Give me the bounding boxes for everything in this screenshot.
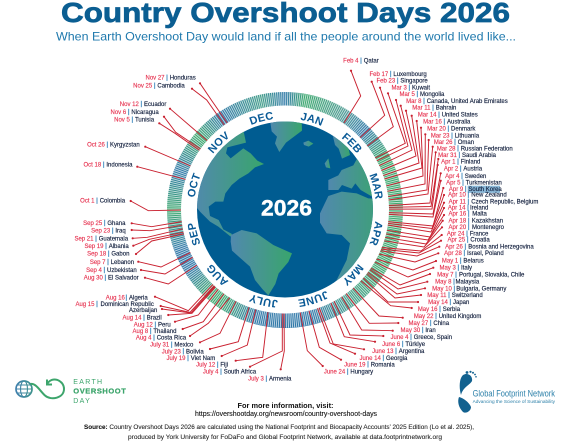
country labels: right side: June 14 (359, 356, 381, 362)
country labels: right side: Bulgaria, Germany (456, 287, 506, 293)
country labels: right side: May 22 (414, 314, 434, 320)
country labels: right side: Hungary (350, 370, 373, 376)
country labels: left side: July 19 (166, 356, 186, 362)
Iceland (303, 141, 313, 147)
country labels: right side: Portugal, Slovakia, Chile (459, 273, 525, 279)
country labels: right side: Romania (371, 362, 395, 368)
country labels: left side: Armenia (269, 377, 292, 383)
country labels: right side: Montenegro (472, 225, 505, 231)
country labels: left side: Nov 5 (114, 118, 130, 124)
footer: source note: produced by York University for FoDaFo and Global Footprint Network, available at data.footprintnetwork.org (128, 434, 442, 441)
country labels: right side (324, 58, 538, 376)
country labels: right side: South Korea (468, 187, 502, 193)
country labels: left side: Aug 12 (134, 323, 153, 329)
month names: OCT (188, 172, 200, 197)
country labels: right side: Canada, United Arab Emirates (427, 99, 508, 105)
country labels: right side: Austria (463, 167, 483, 173)
ring tick separators (174, 98, 396, 320)
country labels: left side: Sep 18 (87, 252, 107, 258)
country labels: right side: Mongolia (420, 92, 445, 98)
country labels: right side: June 6 (382, 342, 401, 348)
country labels: right side: May 30 (401, 328, 421, 334)
country labels: right side: May 1 (442, 259, 459, 265)
month names: DEC (249, 112, 273, 125)
country labels: right side: June 13 (372, 349, 394, 355)
country labels: right side: Kazakhstan (472, 219, 503, 225)
country labels: left side: July 12 (196, 363, 216, 369)
logo: Global Footprint Network: Global Footprint Network (473, 388, 555, 398)
Africa (320, 192, 373, 281)
country labels: right side: May 10 (432, 287, 452, 293)
country labels: left side: Aug 8 (133, 329, 149, 335)
Scandinavia (333, 135, 350, 159)
country labels: right side: Mar 5 (399, 92, 415, 98)
country labels: right side: Switzerland (452, 293, 483, 299)
country labels: right side: Apr 10 (448, 193, 466, 199)
month names: NOV (208, 131, 228, 154)
Greenland (270, 120, 302, 152)
country labels: right side: Apr 4 (445, 174, 460, 180)
logo: Earth Overshoot Day: EARTH (73, 379, 103, 386)
country labels: right side: France (470, 232, 489, 238)
country labels: right side: June 4 (390, 335, 409, 341)
country labels: right side: May 11 (427, 293, 447, 299)
South America (231, 230, 292, 295)
country labels: right side: May 8 (435, 280, 452, 286)
country labels: left side: Nov 27 (145, 76, 165, 82)
month names: MAR (370, 173, 383, 200)
country labels: left side: Aug 30 (84, 276, 103, 282)
country labels: right side: Mar 3 (391, 86, 407, 92)
country labels: left side: Oct 1 (80, 199, 95, 205)
country labels: right side: Türkiye (405, 342, 426, 348)
country labels: left side: July 4 (203, 370, 219, 376)
leader lines from ring to country labels (131, 71, 444, 369)
country labels: right side: Apr 16 (449, 212, 467, 218)
country labels: right side: Greece, Spain (414, 335, 452, 341)
country labels: right side: May 16 (418, 307, 438, 313)
logo: Global Footprint Network: Advancing the Science of Sustainability (473, 399, 556, 404)
country labels: left side: Ghana (107, 221, 126, 227)
country labels: left side: Sep 7 (90, 260, 106, 266)
country labels: left side: Nov 12 (120, 102, 139, 108)
month names: JUNE (298, 291, 328, 307)
country labels: left side: Sep 25 (83, 221, 103, 227)
country labels: right side: Feb 17 (370, 72, 389, 78)
country labels: left side: Gabon (111, 252, 129, 258)
country labels: right side: Malaysia (456, 280, 480, 286)
country labels: left side: Honduras (170, 76, 196, 82)
globe year label: 2026 (261, 196, 312, 220)
country labels: right side: Saudi Arabia (462, 153, 497, 159)
country labels: left side: July 31 (150, 343, 170, 349)
country labels: right side: Belarus (463, 259, 484, 265)
logo: Earth Overshoot Day: OVERSHOOT (73, 386, 126, 396)
white band for month names (181, 106, 389, 314)
country labels: right side: Ireland (470, 206, 488, 212)
country labels: left side: Kyrgyzstan (110, 143, 140, 149)
month names: SEP (188, 224, 200, 246)
country labels: left side: Tunisia (135, 118, 155, 124)
country labels: right side: Mar 23 (431, 134, 450, 140)
date ring of tick marks (167, 92, 403, 328)
country labels: left side (74, 74, 292, 383)
country labels: left side: Sep 23 (91, 229, 111, 235)
month names: AUG (207, 264, 228, 285)
country labels: right side: Apr 18 (449, 219, 467, 225)
month names: FEB (342, 132, 362, 152)
country labels: right side: Apr 11 (449, 200, 466, 206)
country labels: left side: Indonesia (106, 163, 133, 169)
country labels: right side: May 3 (439, 266, 456, 272)
subtitle: When Earth Overshoot Day would land if all the people around the world lived like... (56, 30, 516, 44)
month names (188, 112, 383, 308)
month names: APR (370, 221, 382, 246)
country labels: right side: Bosnia and Herzegovina (468, 245, 534, 251)
country labels: left side: Uzbekistan (107, 268, 137, 274)
country labels: right side: Georgia (386, 356, 408, 362)
country labels: right side: Australia (447, 120, 471, 126)
country labels: right side: May 27 (409, 321, 429, 327)
Europe (328, 159, 372, 196)
country labels: right side: Oman (458, 140, 474, 146)
country labels: right side: Mar 8 (406, 99, 422, 105)
footer: more information (195, 401, 377, 418)
country labels: right side: Iran (425, 328, 436, 334)
country labels: left side: Sep 4 (86, 268, 102, 274)
country labels: right side: Malta (472, 212, 488, 218)
country labels: left side: Guatemala (99, 237, 129, 243)
country labels: right side: Apr 14 (448, 206, 466, 212)
country labels: right side: Qatar (364, 59, 379, 65)
country labels: left side: Albania (109, 244, 129, 250)
country labels: right side: Apr 28 (444, 251, 462, 257)
footer: source note (84, 424, 474, 441)
country labels: left side: Colombia (100, 199, 126, 205)
country labels: right side: China (433, 321, 450, 327)
country labels: left side: Mexico (174, 343, 194, 349)
country labels: right side: Feb 4 (343, 59, 359, 65)
country labels: right side: Argentina (399, 349, 425, 355)
country labels: right side: Apr 26 (445, 245, 463, 251)
country labels: left side: Fiji (220, 363, 228, 369)
country labels: right side: New Zealand (471, 193, 507, 199)
country labels: right side: Bahrain (436, 106, 456, 112)
country labels: right side: Mar 16 (423, 120, 442, 126)
country labels: right side: Mar 14 (418, 113, 437, 119)
country labels: right side: Kuwait (412, 86, 430, 92)
country labels: left side: Dominican Republic (100, 302, 154, 308)
country labels: right side: May 7 (437, 273, 454, 279)
globe (197, 122, 373, 298)
country labels: left side: Ecuador (144, 102, 166, 108)
country labels: left side: Peru (158, 323, 171, 329)
country labels: right side: Apr 2 (444, 167, 459, 173)
country labels: right side: June 24 (324, 370, 346, 376)
country labels: left side: Nicaragua (131, 110, 159, 116)
month names: JAN (300, 112, 324, 126)
country labels: right side: Denmark (451, 127, 476, 133)
British Isles (325, 158, 330, 168)
country labels: right side: Apr 5 (446, 181, 461, 187)
footer: more information: https://overshootday.org/newsroom/country-overshoot-days (195, 411, 377, 418)
country labels: left side: South Africa (224, 370, 257, 376)
country labels: left side: Aug 15 (75, 302, 95, 308)
country labels: right side: Finland (461, 160, 480, 166)
month names: JULY (248, 295, 278, 308)
month names: MAY (344, 264, 364, 286)
country labels: left side: July 3 (248, 377, 264, 383)
country labels: right side: Czech Republic, Belgium (471, 200, 538, 206)
country labels: right side: Apr 24 (447, 232, 465, 238)
country labels: left side: Algeria (129, 296, 148, 302)
footer: source note: Source: Country Overshoot Days 2026 are calculated using the National Footprint and Biocapacity Accounts’ 2025 Edition (Lo et al. 2025), (84, 424, 474, 431)
country labels: right side: United Kingdom (439, 314, 481, 320)
country labels: left side: Iraq (115, 229, 126, 235)
country labels: left side: Oct 26 (87, 143, 105, 149)
country labels: right side: May 14 (428, 300, 448, 306)
country labels: right side: Russian Federation (461, 146, 513, 152)
country labels: right side: Lithuania (455, 134, 480, 140)
country labels: left side: Costa Rica (157, 336, 187, 342)
country labels: left side: Azerbaijan (129, 308, 157, 314)
country labels: right side: Apr 9 (449, 187, 464, 193)
country labels: right side: Italy (461, 266, 472, 272)
country labels: right side: Mar 26 (434, 140, 453, 146)
country labels: right side: Singapore (400, 79, 428, 85)
country labels: left side: Aug 14 (122, 316, 142, 322)
country labels: left side: Thailand (153, 329, 176, 335)
country labels: left side: Sep 21 (74, 237, 94, 243)
logo: Earth Overshoot Day (16, 379, 126, 405)
country labels: right side: Mar 31 (438, 153, 457, 159)
country labels: left side: Aug 16 (106, 296, 125, 302)
country labels: right side: Serbia (443, 307, 461, 313)
country labels: left side: Aug 4 (136, 336, 152, 342)
country labels: right side: Japan (453, 300, 469, 306)
country labels: right side: Apr 1 (441, 160, 456, 166)
country labels: left side: Cambodia (157, 84, 185, 90)
logo: Earth Overshoot Day: DAY (73, 398, 91, 405)
country labels: left side: Sep 19 (84, 244, 104, 250)
country labels: left side: Lebanon (111, 260, 134, 266)
logo: Global Footprint Network (458, 371, 556, 413)
country labels: right side: Apr 25 (448, 238, 466, 244)
country labels: right side: Feb 23 (377, 79, 396, 85)
country labels: left side: Nov 25 (133, 84, 153, 90)
country labels: right side: Croatia (470, 238, 490, 244)
country labels: right side: Luxembourg (393, 72, 427, 78)
country labels: right side: Turkmenistan (466, 181, 502, 187)
country labels: right side: Israel, Poland (467, 251, 504, 257)
country labels: right side: Mar 20 (427, 127, 446, 133)
country labels: right side: Apr 20 (449, 225, 467, 231)
country labels: left side: Nov 6 (111, 110, 127, 116)
footer: more information: For more information, visit: (238, 401, 334, 410)
country labels: left side: Viet Nam (191, 356, 215, 362)
country labels: left side: Oct 18 (84, 163, 102, 169)
country labels: right side: Mar 11 (412, 106, 431, 112)
country labels: left side: July 23 (162, 349, 181, 355)
North America (193, 130, 264, 237)
country labels: right side: Sweden (465, 174, 486, 180)
country labels: right side: June 19 (344, 362, 366, 368)
highlight: South Korea (468, 186, 500, 193)
country labels: left side: Brazil (147, 316, 162, 322)
country labels: left side: Bolivia (186, 349, 204, 355)
country labels: right side: Mar 28 (437, 146, 456, 152)
country labels: right side: United States (442, 113, 478, 119)
country labels: left side: El Salvador (108, 276, 139, 282)
